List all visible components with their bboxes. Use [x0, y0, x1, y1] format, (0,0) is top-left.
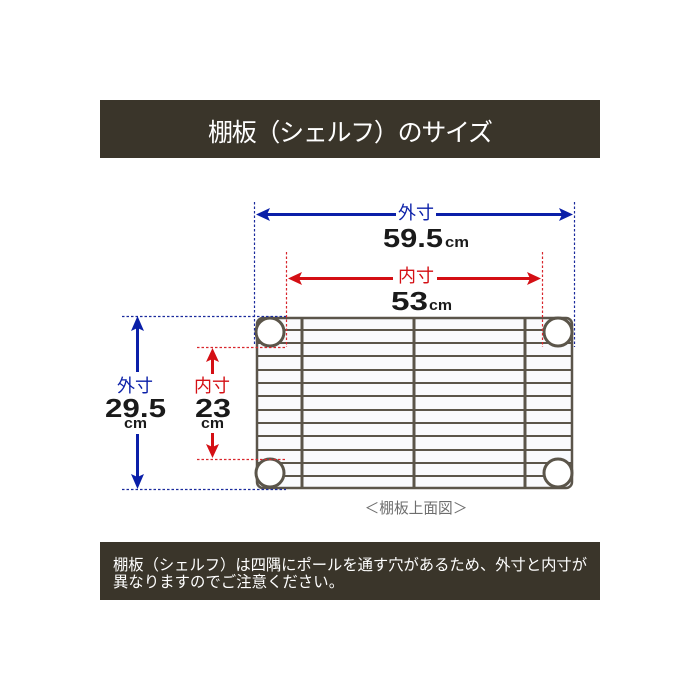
- outer width label: 外寸: [398, 203, 434, 223]
- outer width arrow: [256, 208, 573, 221]
- diagram caption: ＜棚板上面図＞: [365, 500, 467, 517]
- inner width label: 内寸: [398, 266, 434, 286]
- inner width label: 53: [391, 286, 428, 316]
- pole holes: [256, 318, 572, 487]
- note text: 棚板（シェルフ）は四隅にポールを通す穴があるため、外寸と内寸が: [113, 557, 587, 574]
- outer depth arrow: [131, 316, 144, 489]
- inner depth label: cm: [201, 415, 224, 432]
- inner depth label: 内寸: [194, 376, 230, 396]
- inner dimension guide lines: [197, 252, 542, 460]
- outer dimension guide lines: [122, 202, 574, 490]
- outer depth label: 29.5: [105, 393, 166, 423]
- shelf top view diagram: [256, 318, 572, 488]
- outer depth label: 外寸: [117, 376, 153, 396]
- outer depth label: [105, 376, 166, 432]
- inner width label: cm: [429, 297, 452, 314]
- inner width label: [391, 266, 452, 316]
- inner depth label: [194, 376, 231, 432]
- outer depth label: cm: [124, 415, 147, 432]
- inner depth label: 23: [195, 393, 231, 423]
- outer width label: cm: [445, 234, 469, 251]
- note banner: [100, 542, 600, 600]
- inner depth arrow: [206, 348, 219, 458]
- title banner: [100, 100, 600, 158]
- title: 棚板（シェルフ）のサイズ: [208, 119, 493, 147]
- outer width label: [383, 203, 469, 253]
- note banner: 異なりますのでご注意ください。: [113, 574, 344, 591]
- outer width label: 59.5: [383, 223, 443, 253]
- inner width arrow: [288, 272, 541, 285]
